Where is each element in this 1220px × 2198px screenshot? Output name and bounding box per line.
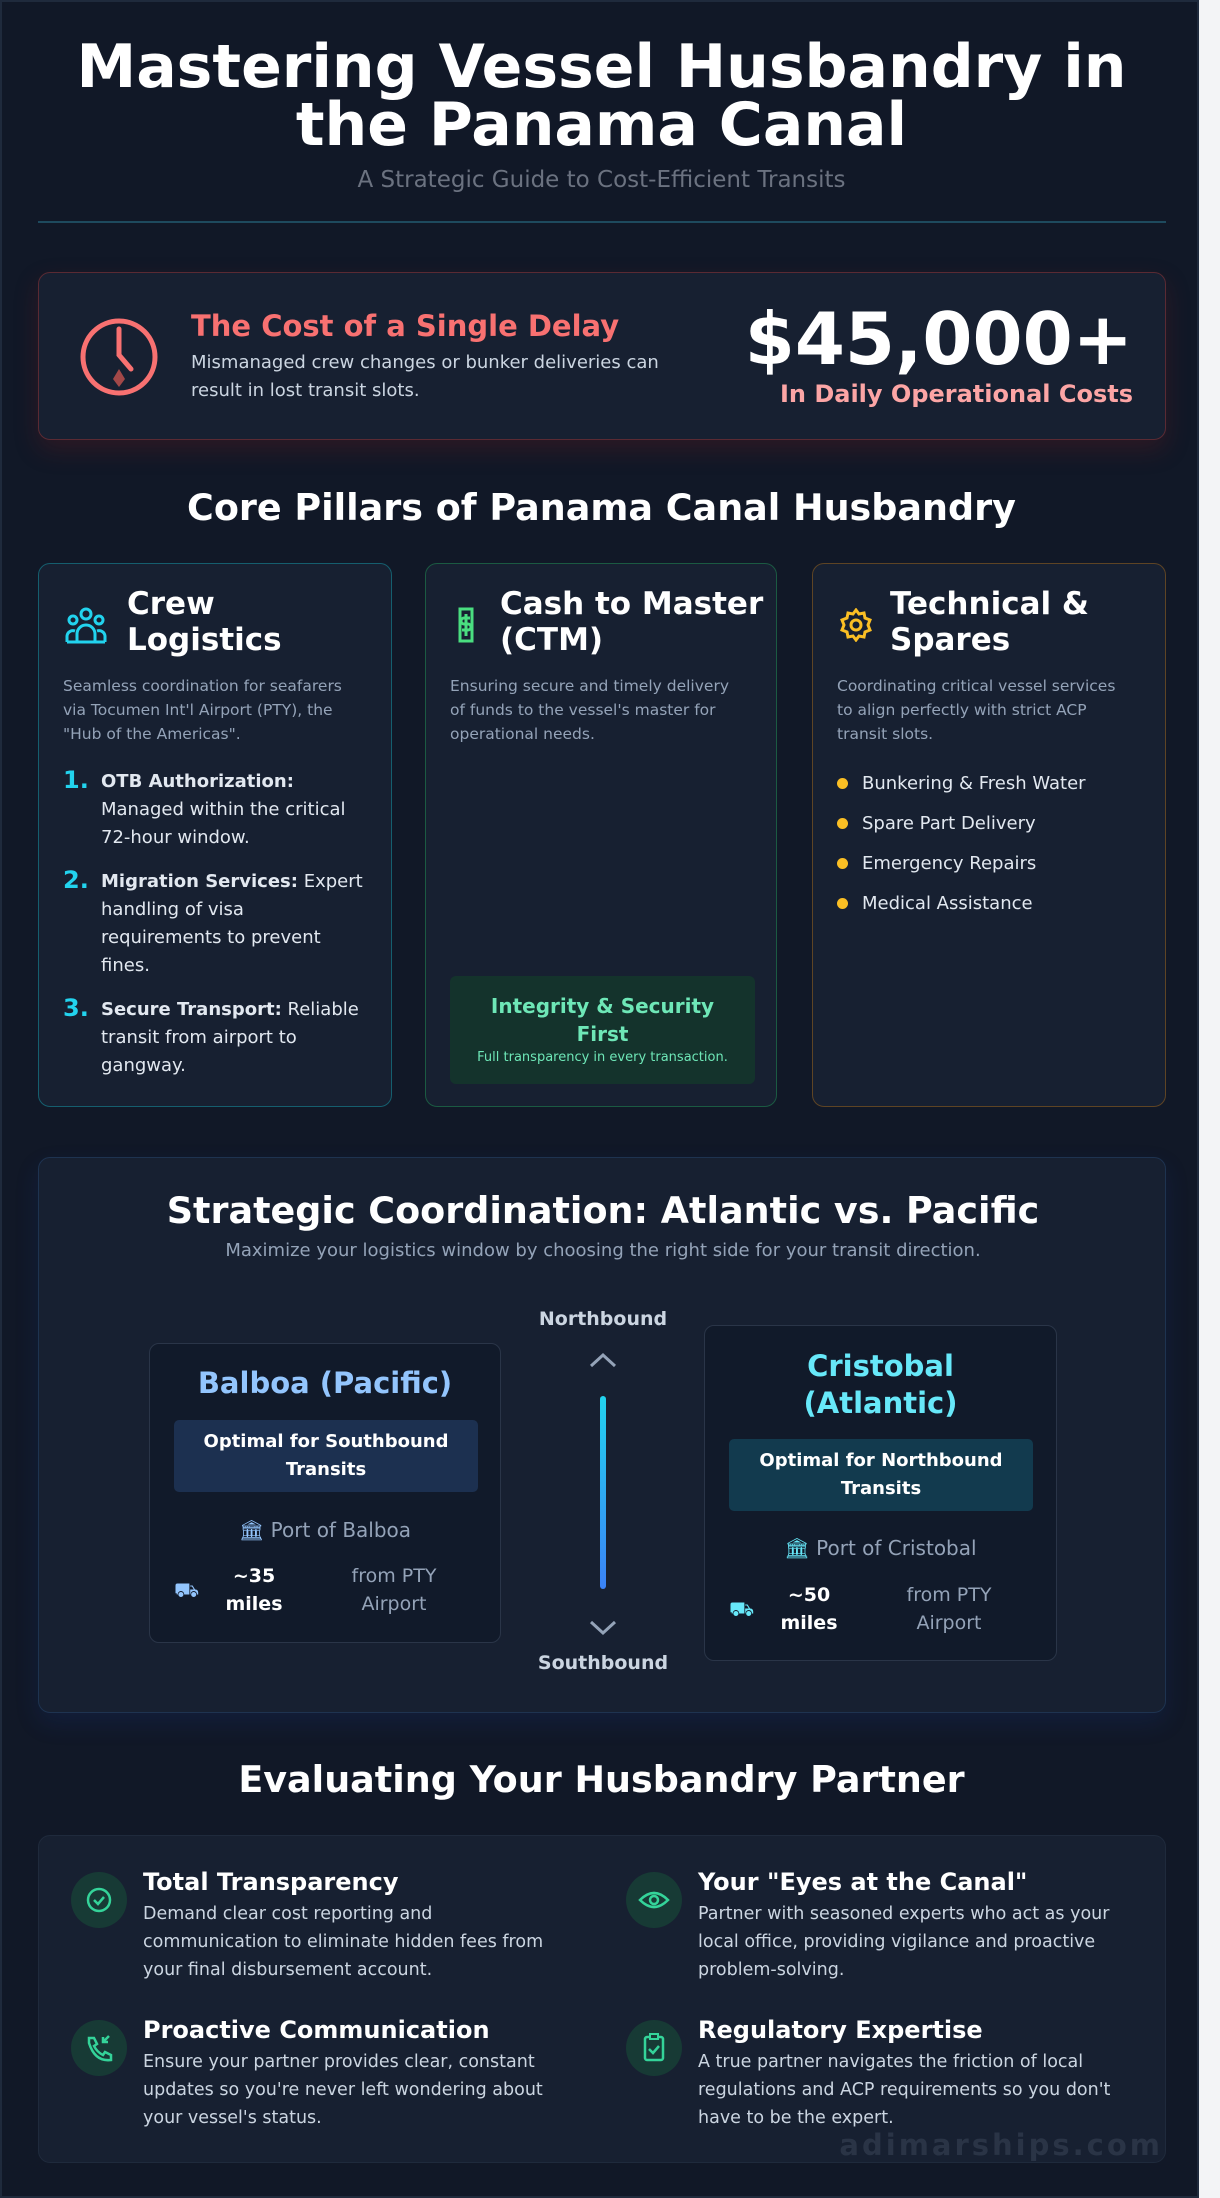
stat: 50 miles: miles <box>780 1612 838 1634</box>
item: proactive communication: Proactive Communication <box>143 2016 490 2044</box>
heading: cash to master: (CTM) <box>500 622 603 658</box>
list: crew steps: OTB Authorization: Managed within the critical 72-hour window. <box>101 771 346 848</box>
list: crew steps: Secure Transport: Reliable transit from airport to gangway. <box>101 999 359 1076</box>
list: services: Spare Part Delivery <box>862 813 1036 834</box>
card: cristobal <box>704 1325 1057 1661</box>
badge: northbound: Optimal for Northbound <box>759 1450 1003 1471</box>
arrow: north/south <box>538 1308 668 1674</box>
stat: 50 miles <box>729 1584 992 1634</box>
stat: 35 miles: ⛟ <box>174 1578 199 1602</box>
text: ctm description: Ensuring secure and timely delivery of funds to the vessel's master for operational needs. <box>450 677 729 743</box>
panel: crew logistics <box>38 563 392 1107</box>
arrow: north/south: Northbound <box>539 1308 667 1330</box>
heading: crew logistics: Crew <box>127 586 215 622</box>
stat: 35 miles <box>174 1565 436 1615</box>
stat: 50 miles: Airport <box>916 1612 982 1634</box>
item: total transparency <box>71 1868 543 1980</box>
item: total transparency: Demand clear cost reporting and communication to eliminate hidden fees from your final disbursement account. <box>143 1904 543 1980</box>
badge: northbound: Transits <box>841 1478 921 1499</box>
heading: cost of a single delay: The Cost of a Single Delay <box>191 309 619 343</box>
item: total transparency: Total Transparency <box>143 1868 399 1896</box>
badge: southbound: Optimal for Southbound <box>204 1431 448 1452</box>
heading: cash to master: Cash to Master <box>500 586 763 622</box>
heading: evaluating partner: Evaluating Your Husbandry Partner <box>238 1758 965 1801</box>
panel: technical & spares <box>812 563 1166 1107</box>
text: crew description: Seamless coordination for seafarers via Tocumen Int'l Airport (PTY), the "Hub of the Americas". <box>63 677 342 743</box>
title: Mastering Vessel Husbandry in <box>76 32 1127 102</box>
icon: gear <box>840 608 872 642</box>
stat: 50 miles: from PTY <box>907 1584 991 1606</box>
label: port of balboa: 🏛 Port of Balboa <box>239 1518 411 1542</box>
callout: integrity & security: Full transparency in every transaction. <box>477 1050 728 1065</box>
item: proactive communication <box>71 2016 543 2128</box>
stat: 35 miles: from PTY <box>352 1565 436 1587</box>
item: regulatory expertise: Regulatory Expertise <box>698 2016 983 2044</box>
card: balboa <box>149 1343 501 1643</box>
heading: crew logistics: Logistics <box>127 622 282 658</box>
item: eyes at the canal: Your "Eyes at the Canal" <box>698 1868 1027 1896</box>
stat: 35 miles: ~35 <box>233 1565 275 1587</box>
panel: cost of delay <box>38 272 1166 440</box>
label: port of cristobal: 🏛 Port of Cristobal <box>784 1536 977 1560</box>
text: strategic subtitle: Maximize your logistics window by choosing the right side for your transit direction. <box>225 1240 981 1261</box>
callout: integrity & security: First <box>577 1022 628 1046</box>
heading: core pillars: Core Pillars of Panama Canal Husbandry <box>187 486 1016 529</box>
arrow: north/south: Southbound <box>538 1652 668 1674</box>
heading: cash to master <box>500 586 764 658</box>
item: regulatory expertise <box>626 2016 1110 2128</box>
list: services: Emergency Repairs <box>862 853 1036 874</box>
stat: 50 miles: ~50 <box>788 1584 830 1606</box>
list: crew steps <box>63 766 363 1076</box>
icon: cash <box>458 608 474 642</box>
callout: integrity & security <box>450 976 755 1084</box>
heading: technical & spares: Spares <box>890 622 1010 658</box>
icon: people <box>66 608 106 644</box>
list: services: Medical Assistance <box>862 893 1033 914</box>
badge: southbound <box>174 1420 478 1492</box>
stat: 50 miles: ⛟ <box>729 1597 754 1621</box>
card: cristobal: (Atlantic) <box>804 1386 957 1420</box>
item: proactive communication: Ensure your partner provides clear, constant updates so you're never left wondering about your vessel's status. <box>143 2052 543 2128</box>
list: crew steps: Migration Services: Expert handling of visa requirements to prevent fines. <box>101 871 363 976</box>
subtitle: A Strategic Guide to Cost-Efficient Transits <box>357 167 846 193</box>
title <box>76 32 1127 160</box>
list: crew steps: 3. <box>63 994 89 1022</box>
text: delay description: Mismanaged crew changes or bunker deliveries can result in lost transit slots. <box>191 352 659 401</box>
badge: southbound: Transits <box>286 1459 366 1480</box>
list: crew steps: 2. <box>63 866 89 894</box>
list: crew steps: 1. <box>63 766 89 794</box>
item: eyes at the canal <box>626 1868 1110 1980</box>
list: services: Bunkering & Fresh Water <box>862 773 1086 794</box>
item: eyes at the canal: Partner with seasoned experts who act as your local office, providing vigilance and proactive problem-solving. <box>698 1904 1109 1980</box>
title: the Panama Canal <box>296 90 907 160</box>
heading: technical & spares <box>890 586 1089 658</box>
card: cristobal: Cristobal <box>807 1349 954 1383</box>
watermark: adimarships.com <box>839 2128 1163 2162</box>
item: regulatory expertise: A true partner navigates the friction of local regulations and ACP requirements so you don't have to be the expert. <box>698 2052 1110 2128</box>
heading: technical & spares: Technical & <box>890 586 1089 622</box>
stat: $45,000+: $45,000+ <box>745 297 1133 381</box>
list: services <box>837 773 1086 914</box>
stat: 35 miles: Airport <box>361 1593 427 1615</box>
heading: strategic coordination: Strategic Coordination: Atlantic vs. Pacific <box>167 1189 1039 1232</box>
stat: $45,000+: In Daily Operational Costs <box>780 380 1133 408</box>
panel: cash to master <box>425 563 777 1107</box>
stat: 35 miles: miles <box>225 1593 283 1615</box>
badge: northbound <box>729 1439 1033 1511</box>
text: technical description: Coordinating critical vessel services to align perfectly with strict ACP transit slots. <box>837 677 1115 743</box>
icon: clock <box>80 318 158 396</box>
panel: strategic coordination <box>38 1157 1166 1713</box>
heading: crew logistics <box>127 586 282 658</box>
callout: integrity & security: Integrity & Security <box>491 994 714 1018</box>
panel: partner criteria <box>38 1835 1166 2163</box>
card: balboa: Balboa (Pacific) <box>198 1366 452 1400</box>
